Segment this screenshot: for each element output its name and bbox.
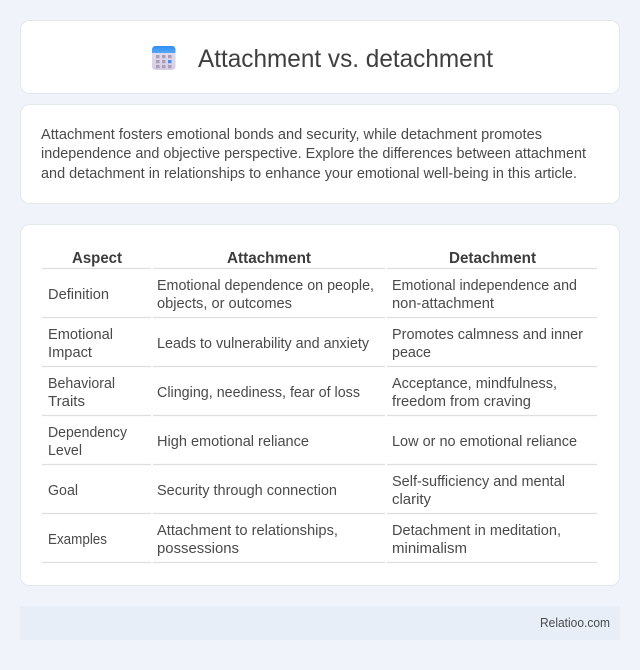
table header row <box>42 250 597 268</box>
row: Examples <box>42 523 597 562</box>
title: Attachment vs. detachment <box>198 45 493 73</box>
intro text: and detachment in relationships to enhance your emotional well-being in this article. <box>41 166 577 182</box>
footer credit: Relatioo.com <box>540 616 610 630</box>
row: Definition <box>42 278 597 318</box>
row: Emotional Impact: peace <box>392 345 431 361</box>
row: Dependency Level <box>42 425 597 464</box>
table header row: Aspect <box>72 250 123 267</box>
row: Definition: Definition <box>48 287 109 303</box>
row: Examples: Detachment in meditation, <box>392 523 561 539</box>
row: Examples: minimalism <box>392 541 467 557</box>
row: Goal: Security through connection <box>157 483 337 499</box>
row: Emotional Impact: Emotional <box>48 327 113 343</box>
row: Goal: clarity <box>392 492 432 508</box>
row: Definition: non-attachment <box>392 296 494 312</box>
row: Behavioral Traits: freedom from craving <box>392 394 531 410</box>
table header row: Detachment <box>449 250 537 267</box>
row: Dependency Level: Level <box>48 443 82 459</box>
row: Goal <box>42 474 597 514</box>
row: Behavioral Traits: Traits <box>48 394 85 410</box>
row: Behavioral Traits: Clinging, neediness, fear of loss <box>157 385 360 401</box>
intro panel <box>20 104 620 204</box>
row: Emotional Impact: Promotes calmness and inner <box>392 327 583 343</box>
row: Goal: Self-sufficiency and mental <box>392 474 565 490</box>
row: Dependency Level: Low or no emotional reliance <box>392 434 577 450</box>
row: Examples: Examples <box>48 532 107 548</box>
row: Dependency Level: Dependency <box>48 425 128 441</box>
row: Behavioral Traits <box>42 376 597 416</box>
row: Definition: Emotional dependence on people, <box>157 278 374 294</box>
row: Behavioral Traits: Behavioral <box>48 376 115 392</box>
row: Goal: Goal <box>48 483 78 499</box>
header panel <box>20 20 620 94</box>
row: Emotional Impact: Impact <box>48 345 92 361</box>
row: Emotional Impact: Leads to vulnerability and anxiety <box>157 336 370 352</box>
row: Examples: Attachment to relationships, <box>157 523 338 539</box>
row: Examples: possessions <box>157 541 239 557</box>
footer bar <box>20 606 620 640</box>
icon: calendar <box>152 46 176 70</box>
intro text <box>41 127 586 182</box>
row: Behavioral Traits: Acceptance, mindfulness, <box>392 376 557 392</box>
intro text: independence and objective perspective. Explore the differences between attachment <box>41 146 586 162</box>
row: Dependency Level: High emotional reliance <box>157 434 309 450</box>
table header row: Attachment <box>227 250 312 267</box>
row: Emotional Impact <box>42 327 597 366</box>
comparison table panel <box>20 224 620 586</box>
row: Definition: objects, or outcomes <box>157 296 292 312</box>
row: Definition: Emotional independence and <box>392 278 577 294</box>
intro text: Attachment fosters emotional bonds and security, while detachment promotes <box>41 127 542 143</box>
